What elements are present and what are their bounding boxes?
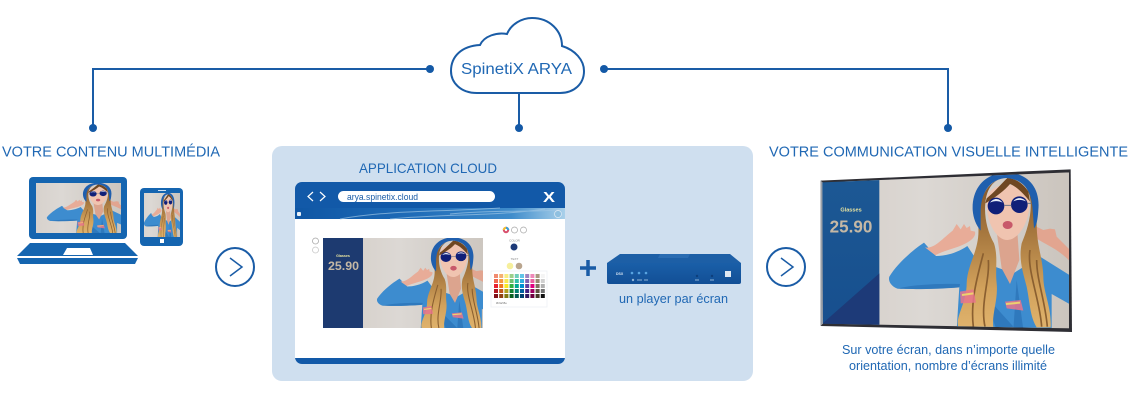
- content preview: Glasses: [336, 254, 350, 258]
- screen caption: Sur votre écran, dans n’importe quelle: [842, 343, 1055, 357]
- colour picker: TEXT: [511, 257, 518, 261]
- arrow: right circle: [767, 248, 805, 286]
- plus sign: [580, 260, 596, 276]
- screen caption: orientation, nombre d’écrans illimité: [849, 359, 1047, 373]
- heading: votre contenu multimédia: VOTRE CONTENU MULTIMÉDIA: [2, 144, 220, 160]
- colour picker: COLOR: [509, 238, 521, 242]
- screen caption: [842, 343, 1055, 373]
- connector lines: [89, 65, 952, 132]
- browser window: [295, 182, 565, 364]
- screen product label: Glasses: [840, 207, 862, 213]
- close mark: X: [543, 189, 555, 206]
- icon: laptop: [17, 177, 142, 264]
- player caption: un player par écran: [619, 292, 728, 306]
- screen blue panel: [820, 180, 879, 327]
- colour picker: [491, 227, 547, 307]
- screen price: 25.90: [830, 217, 872, 237]
- heading: votre communication visuelle intelligente: VOTRE COMMUNICATION VISUELLE INTELLIGENTE: [769, 144, 1128, 160]
- cloud: SpinetiX ARYA: [451, 18, 584, 93]
- cloud: SpinetiX ARYA: SpinetiX ARYA: [461, 61, 573, 78]
- browser navigation chevrons: [308, 192, 325, 201]
- url bar: [338, 191, 495, 203]
- arrow: left circle: [216, 248, 254, 286]
- player device: [607, 254, 741, 284]
- player device: DSX: [616, 272, 624, 276]
- heading: application cloud: APPLICATION CLOUD: [359, 160, 497, 176]
- content preview: 25.90: [328, 261, 359, 273]
- side tool icons: [312, 238, 318, 253]
- display screen: [820, 169, 1072, 332]
- icon: tablet: [140, 188, 183, 246]
- colour picker: #b9a58e: [496, 301, 507, 305]
- url bar: arya.spinetix.cloud: [347, 192, 418, 203]
- content preview: [323, 238, 483, 328]
- panel: application cloud: [272, 146, 753, 381]
